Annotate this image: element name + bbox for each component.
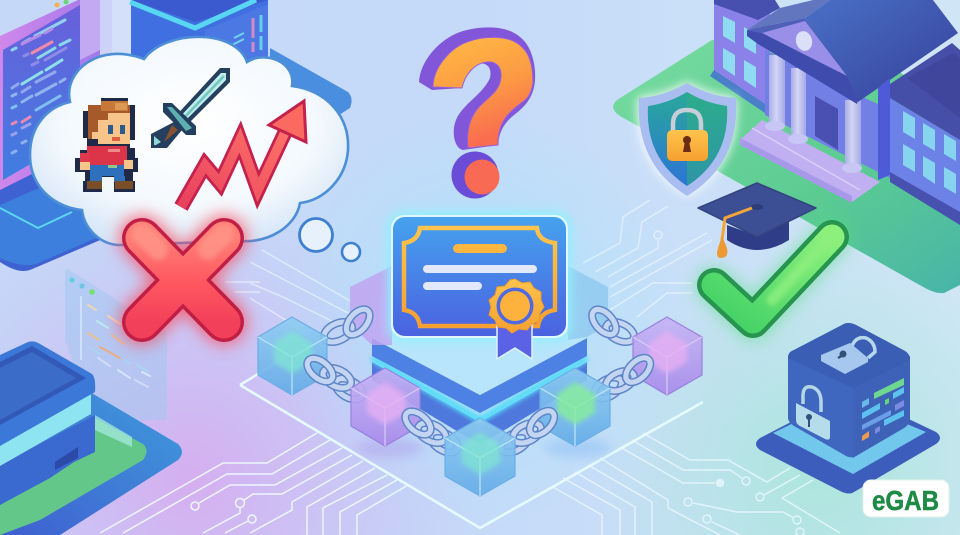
translucent back cube blue — [568, 266, 608, 340]
thought cloud — [30, 37, 360, 261]
block cube 2 — [351, 368, 424, 458]
icon: red cross — [142, 234, 224, 322]
certificate title bar — [453, 244, 507, 253]
block cube 3 — [445, 418, 515, 496]
circuit board traces — [100, 200, 840, 535]
panel: secure locked vault box — [756, 323, 940, 494]
vault cube — [788, 323, 910, 458]
icon: shield with padlock — [638, 82, 737, 196]
certificate gold frame — [404, 228, 555, 326]
building right wing — [878, 43, 960, 225]
panel: lower-left laptop — [0, 341, 182, 535]
thought bubble large — [300, 218, 332, 252]
chain links behind first and last cubes — [321, 305, 637, 346]
certificate seal — [489, 279, 544, 333]
thought bubble small — [342, 243, 360, 261]
block cube 1 — [258, 317, 327, 395]
code lines — [862, 378, 904, 441]
panel: floating code sheet — [65, 269, 167, 445]
translucent back cube purple — [350, 266, 392, 345]
vault base — [756, 393, 940, 494]
building: campus — [710, 0, 960, 225]
certificate ribbon — [497, 325, 532, 359]
icon: question mark — [419, 27, 535, 198]
building steps — [740, 120, 880, 203]
logo badge: eGAB: eGAB — [872, 485, 939, 516]
icon: pixel hero character — [75, 98, 138, 193]
block cube 4 — [540, 368, 612, 458]
chain links between outer and inner cubes — [303, 353, 655, 404]
icon: zigzag red arrow — [181, 101, 306, 207]
panel: upper-left laptop — [0, 0, 131, 271]
icon: graduation cap — [698, 183, 816, 258]
panel: server tower top — [130, 0, 352, 140]
platform: hexagonal stage under the certificate — [372, 240, 587, 445]
icon: green check — [714, 237, 832, 322]
top padlock — [821, 338, 875, 374]
certificate — [388, 212, 571, 359]
block cube 5 — [633, 317, 702, 395]
icon: pixel sword — [151, 68, 230, 148]
building wall and door — [765, 50, 890, 178]
certificate text lines — [423, 265, 537, 290]
building roof and pediment — [747, 0, 958, 104]
chain links into centre cube — [401, 406, 559, 457]
building left wing — [710, 0, 780, 115]
building columns — [765, 55, 862, 173]
side padlock — [796, 387, 830, 440]
right green platform — [613, 40, 960, 293]
padlock body — [667, 130, 708, 161]
